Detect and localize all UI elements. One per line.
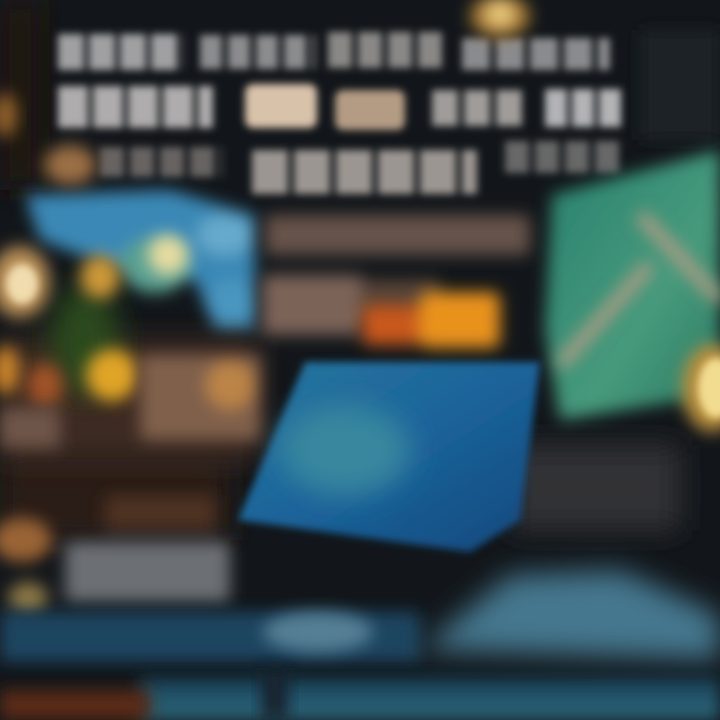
panel: left sky blue (25, 190, 256, 330)
chart: orange highlight bar (362, 292, 500, 348)
panel: centre blue tablet (238, 362, 540, 552)
icon: left plant and lights (0, 93, 260, 460)
panel: green map (545, 150, 720, 432)
panel: bottom blue table (0, 570, 720, 720)
icon: top lamp glow (470, 0, 530, 38)
panel: lower left shelves (0, 355, 260, 614)
heading: blurred title lines (58, 50, 625, 172)
panel: centre text rows (262, 215, 530, 335)
